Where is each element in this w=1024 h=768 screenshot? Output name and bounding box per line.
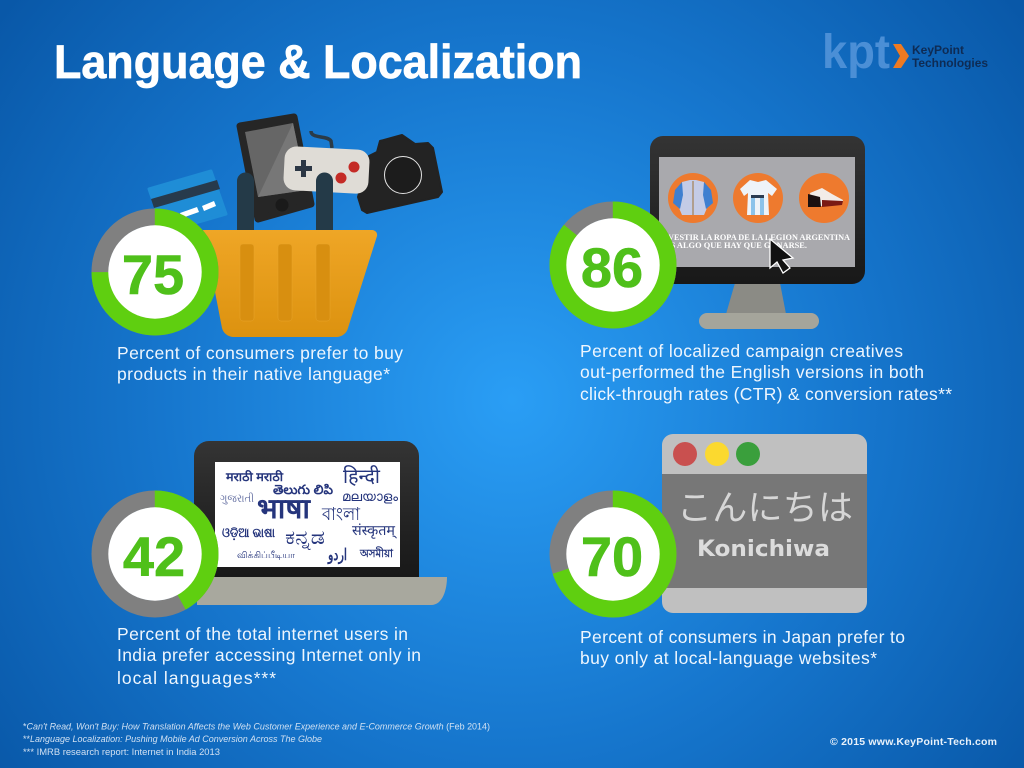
footnotes	[23, 722, 490, 757]
campaign text: ES ALGO QUE HAY QUE GANARSE.	[665, 240, 807, 250]
icon: green button	[736, 442, 760, 466]
romanized greeting: Konichiwa	[697, 537, 830, 562]
logo: KeyPoint Technologies: Technologies	[912, 58, 988, 70]
icon: yellow button	[705, 442, 729, 466]
footnotes: *Can't Read, Won't Buy: How Translation Affects the Web Customer Experience and E-Commerce Growth (Feb 2014)	[23, 722, 490, 732]
campaign text	[665, 232, 851, 250]
text: India internet users: local languages***	[117, 668, 276, 688]
text: localized campaigns: click-through rates (CTR) & conversion rates**	[580, 384, 952, 404]
word cloud text: മലയാളം	[342, 489, 399, 504]
icon: basket handles	[237, 172, 333, 230]
icon: laptop base	[197, 577, 447, 605]
word cloud text: भाषा	[257, 493, 312, 524]
donut: 70 percent	[558, 499, 668, 609]
donut: 86 percent	[558, 210, 668, 320]
word cloud text: हिन्दी	[343, 465, 381, 488]
Japanese greeting: こんにちは	[677, 480, 853, 531]
text: Japan consumers: buy only at local-language websites*	[580, 648, 877, 668]
text: native language	[117, 343, 403, 384]
icon: mouse cursor	[770, 239, 793, 273]
icon: monitor base	[699, 313, 819, 329]
title: Language & Localization	[54, 36, 582, 89]
campaign text: VESTIR LA ROPA DE LA LEGION ARGENTINA	[668, 232, 851, 242]
icon: browser window	[662, 434, 867, 613]
text: India internet users	[117, 624, 421, 688]
footnotes: **Language Localization: Pushing Mobile Ad Conversion Across The Globe	[23, 734, 322, 744]
icon: smartphone	[240, 117, 311, 219]
copyright: © 2015 www.KeyPoint-Tech.com	[830, 736, 997, 748]
word cloud text: मराठी मराठी	[225, 470, 284, 484]
icon: desktop monitor with campaign	[650, 136, 865, 329]
word cloud text: తెలుగు లిపి	[273, 482, 334, 497]
text: Japan consumers: Percent of consumers in Japan prefer to	[580, 627, 905, 647]
footnotes: *** IMRB research report: Internet in India 2013	[23, 747, 220, 757]
text: native language: Percent of consumers prefer to buy	[117, 343, 403, 363]
browser frame	[662, 434, 867, 613]
text: native language: products in their native language*	[117, 364, 390, 384]
icon: shirt badge	[733, 173, 783, 223]
donut: 86 percent: 86	[581, 236, 643, 299]
icon: credit card	[149, 171, 226, 232]
icon: red button	[673, 442, 697, 466]
donut: 70 percent: 70	[581, 525, 643, 588]
donut: 75 percent: 75	[122, 243, 184, 306]
word cloud text: संस्कृतम्	[352, 522, 397, 539]
text: localized campaigns	[580, 341, 952, 404]
icon: jacket badge	[668, 173, 718, 223]
word cloud text: விக்கிப்பீடியா	[237, 550, 295, 560]
icon: shoe badge	[799, 173, 849, 223]
icon: basket body	[203, 230, 377, 337]
icon: game controller	[283, 146, 370, 194]
donut: 42 percent	[100, 499, 210, 609]
icon: monitor frame	[650, 136, 865, 284]
icon: laptop lid	[194, 441, 419, 577]
icon: basket ribs	[240, 244, 330, 321]
word cloud text	[220, 465, 399, 565]
word cloud text: ಕನ್ನಡ	[285, 527, 325, 550]
logo: KeyPoint Technologies: kpt	[822, 26, 890, 79]
icon: game cable	[311, 131, 332, 148]
campaign screen	[659, 157, 855, 267]
word cloud screen	[215, 462, 400, 567]
word cloud text: বাংলা	[321, 504, 361, 524]
icon: camera	[358, 135, 442, 213]
donut: 42 percent: 42	[123, 525, 185, 588]
word cloud text: اردو	[327, 547, 347, 565]
word cloud text: ગુજરાતી	[220, 492, 254, 505]
logo: KeyPoint Technologies: KeyPoint	[912, 45, 964, 57]
text: Japan consumers	[580, 627, 905, 668]
text: localized campaigns: out-performed the English versions in both	[580, 362, 924, 382]
icon: shopping basket with products	[149, 117, 442, 337]
icon: laptop with Indian languages	[194, 441, 447, 605]
donut: 75 percent	[100, 217, 210, 327]
word cloud text: ଓଡ଼ିଆ ଭାଷା	[222, 525, 275, 541]
text: India internet users: India prefer accessing Internet only in	[117, 645, 421, 665]
logo: KeyPoint Technologies	[822, 26, 988, 79]
word cloud text: অসমীয়া	[359, 546, 394, 560]
icon: monitor stand	[726, 283, 786, 314]
text: localized campaigns: Percent of localized campaign creatives	[580, 341, 903, 361]
text: India internet users: Percent of the total internet users in	[117, 624, 408, 644]
browser content area	[662, 474, 867, 588]
